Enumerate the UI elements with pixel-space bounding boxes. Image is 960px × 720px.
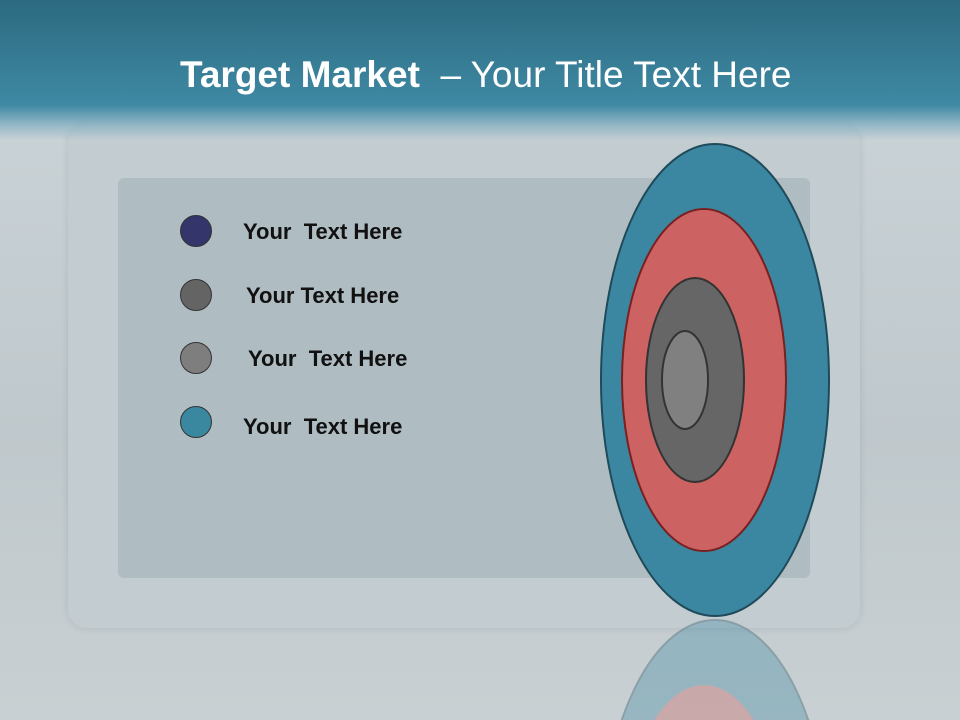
list item 2	[180, 279, 399, 311]
list item 2: Your Text Here	[246, 283, 399, 308]
rings	[601, 144, 829, 616]
list item 4	[180, 406, 402, 439]
header bar	[0, 0, 960, 140]
list item 4: Your Text Here	[243, 414, 402, 439]
list item 3: Your Text Here	[248, 346, 407, 371]
tablet background	[68, 125, 860, 628]
target chart	[600, 143, 830, 720]
tablet screen	[118, 178, 810, 578]
reflection	[601, 620, 829, 720]
list item 1: Your Text Here	[243, 219, 402, 244]
title: Target Market – Your Title Text Here	[180, 54, 791, 95]
list item 3	[180, 342, 407, 374]
list item 1	[180, 215, 402, 247]
